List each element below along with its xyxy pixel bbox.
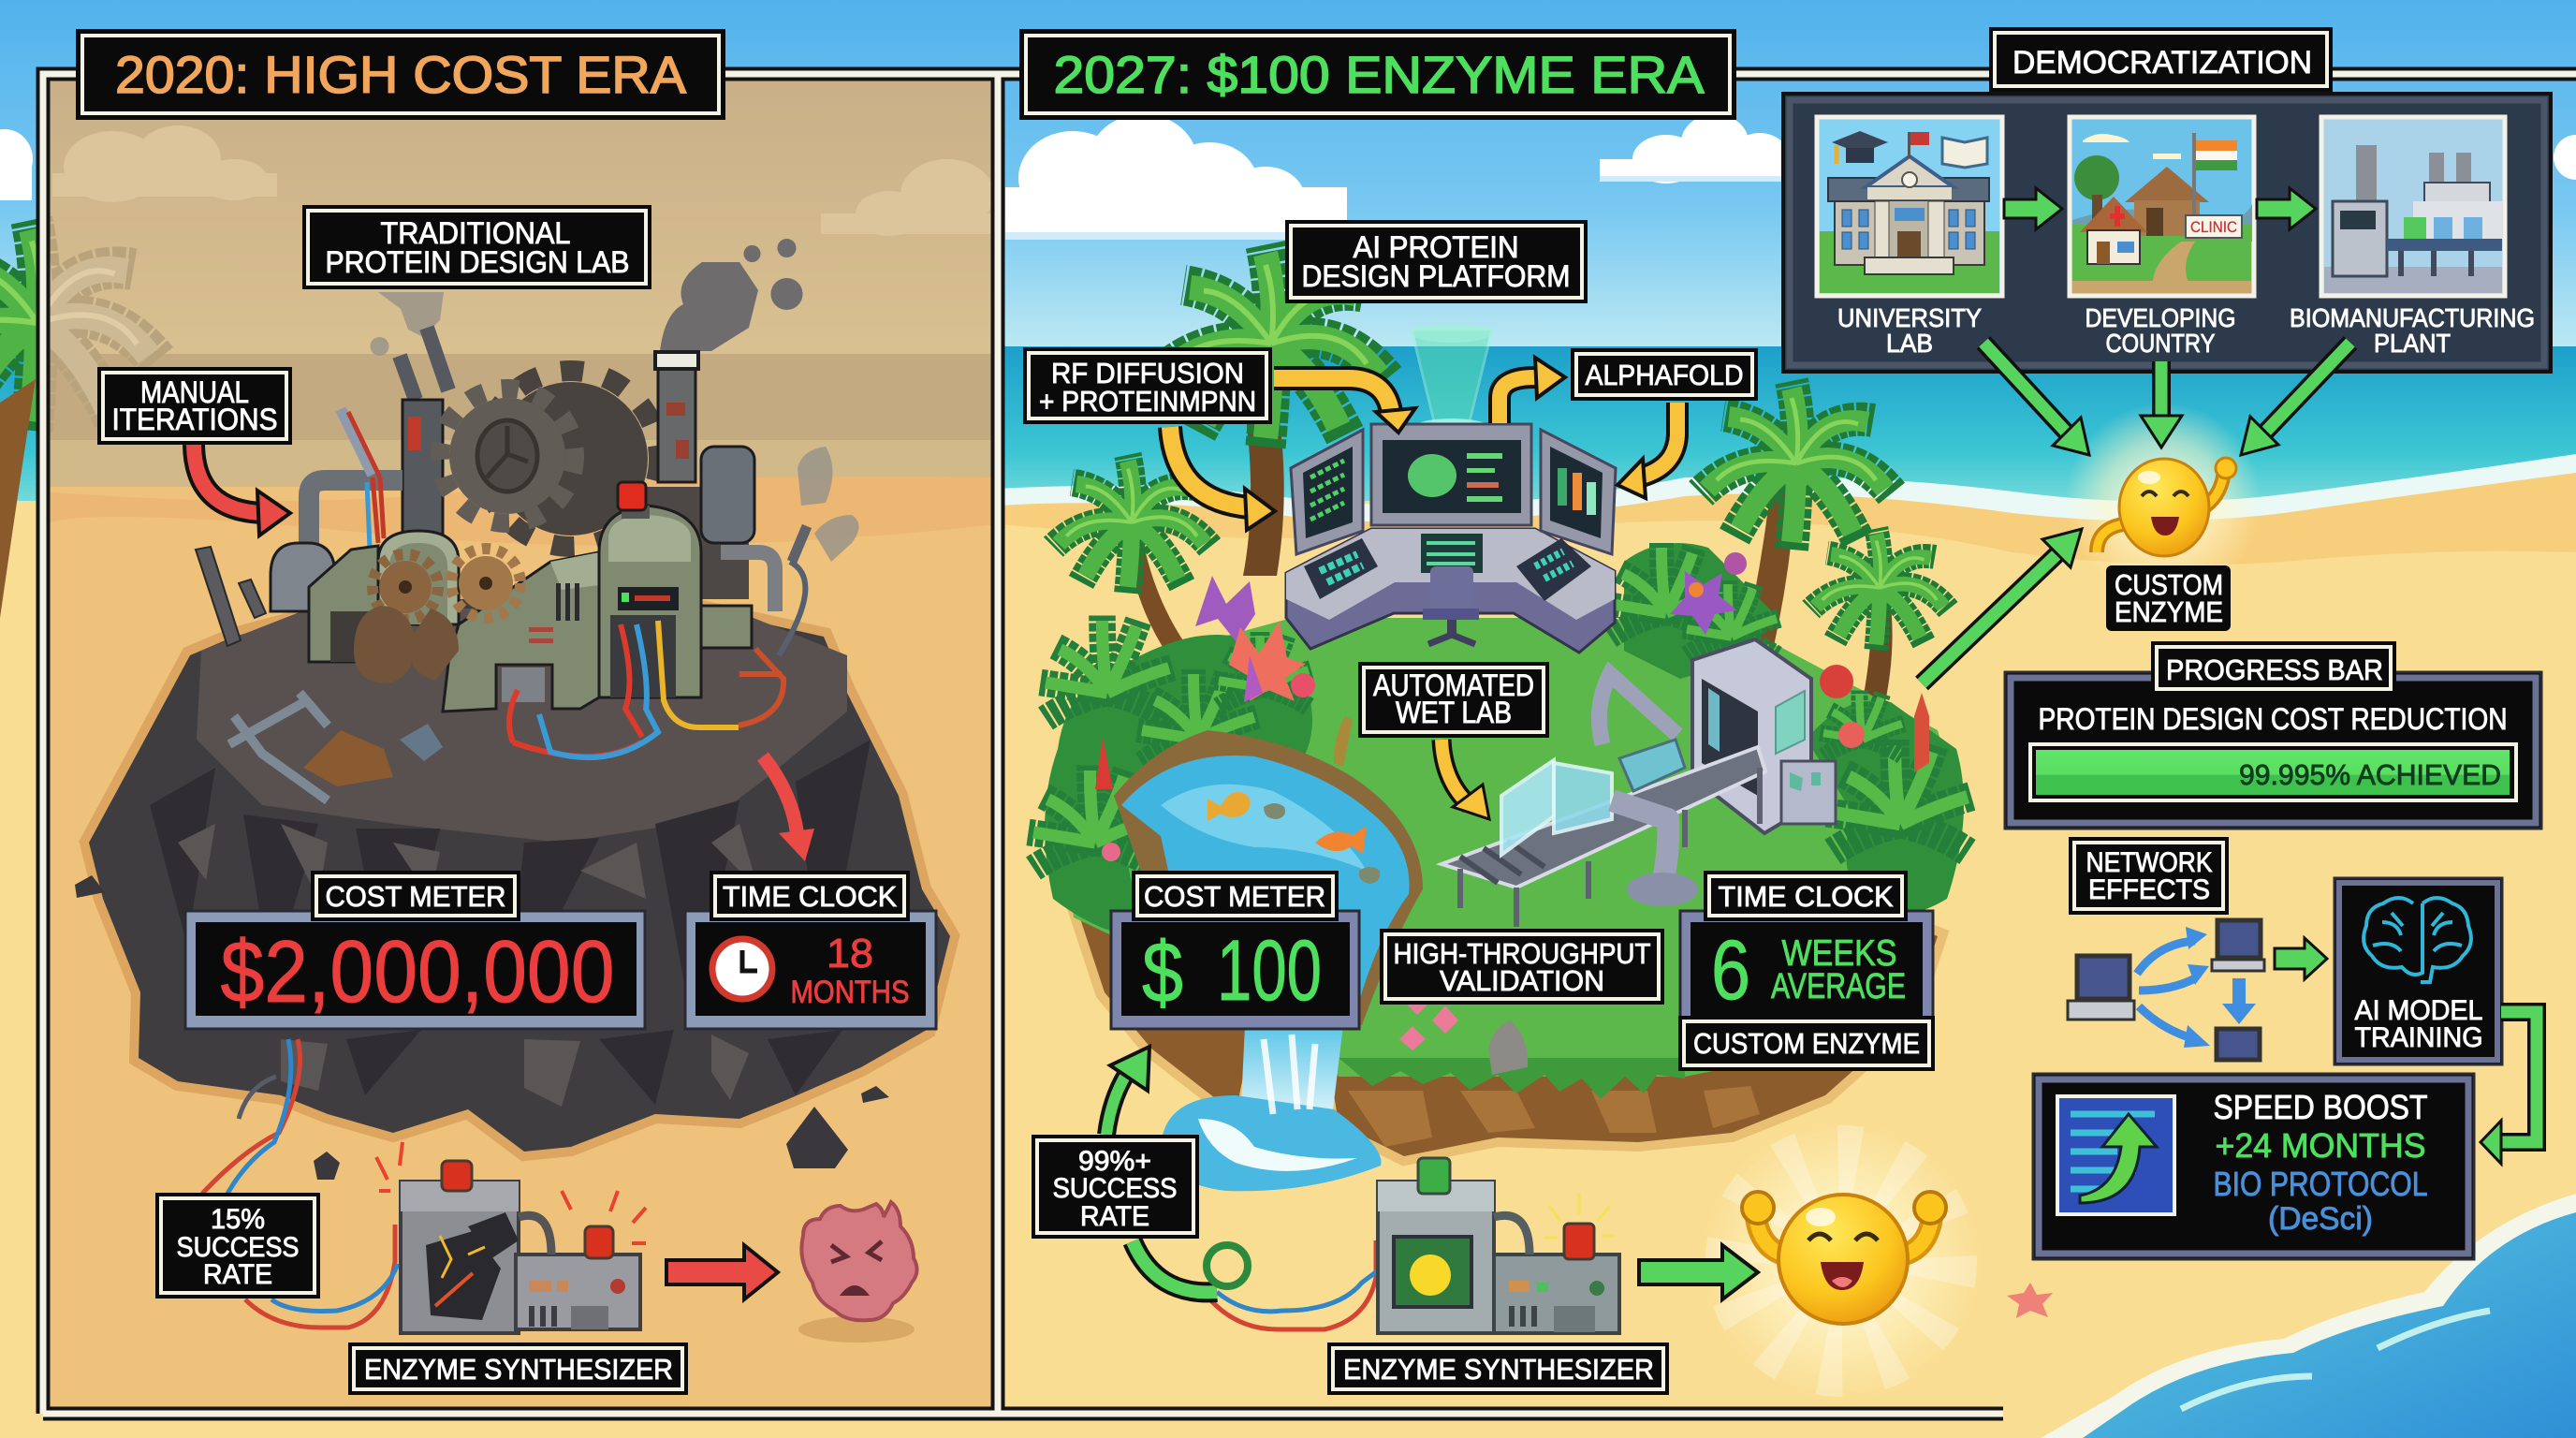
title: 2020 high cost era: 2020: HIGH COST ERA [115,45,687,104]
label: university lab [1837,303,1982,358]
time clock: 2020: MONTHS [790,975,910,1010]
panel: speed boost: SPEED BOOST [2213,1088,2428,1126]
label: manual iterations [97,367,292,445]
wires and green loop: synthesizer to success rate [1133,1240,1381,1329]
label: enzyme synthesizer 2027: ENZYME SYNTHESIZER [1343,1353,1654,1386]
wires: lab to synthesizer [202,1039,398,1328]
label: developing country [2086,303,2235,358]
label: custom enzyme banner: CUSTOM ENZYME [1693,1027,1920,1060]
palm trees behind the island [1123,244,1893,718]
panel: AI model training: TRAINING [2355,1022,2482,1053]
arrow: red lab to time clock [763,756,814,861]
arrow: wet lab to conveyor [1442,740,1489,819]
arrow: AI model to speed boost [2481,1012,2537,1164]
time clock: 2027: 6 [1711,924,1750,1018]
tab: progress bar: PROGRESS BAR [2166,653,2383,686]
tab: progress bar [2151,641,2396,695]
card: developing country clinic [2070,117,2254,296]
icon: hologram cone [1412,324,1492,433]
diagram: network of laptops [2068,920,2264,1060]
panel: speed boost [2033,1074,2474,1259]
label: automated wet lab: AUTOMATED [1373,668,1534,702]
icon: upward green arrow screen [2057,1096,2174,1214]
time clock: 2020 [685,871,936,1029]
arrow: RF diffusion to platform [1274,378,1415,433]
panel: progress bar: PROTEIN DESIGN COST REDUCTION [2039,702,2507,736]
panel: AI model training: AI MODEL [2355,995,2482,1026]
label: AI protein design platform: DESIGN PLATFORM [1301,259,1571,293]
icon: sad misfolded enzyme [798,1202,917,1343]
icon: happy custom enzyme [1701,1121,1982,1401]
label: developing country: COUNTRY [2106,329,2216,358]
icon: laptop source [2068,956,2134,1020]
cost meter: 2027: $ [1142,925,1183,1020]
time clock: 2027: WEEKS [1782,933,1896,974]
panel: democratization [1783,27,2551,372]
arrow: RF diffusion to console [1170,427,1275,530]
illustration: broken rock island [75,599,950,1180]
label: manual iterations: ITERATIONS [112,403,277,436]
label: university lab: LAB [1886,329,1933,358]
label: university lab: UNIVERSITY [1837,303,1982,332]
icon: laptop lower [2217,1029,2260,1060]
label: enzyme synthesizer 2020: ENZYME SYNTHESIZER [364,1353,673,1386]
label: AI protein design platform [1285,220,1588,303]
cost meter: 2020: $2,000,000 [221,922,614,1020]
arrow: developing country to enzyme [2141,361,2182,448]
card: biomanufacturing plant [2321,117,2505,296]
cost meter: 2020 [185,871,645,1029]
label: 15% success rate [155,1193,320,1299]
tab: time clock [710,871,910,921]
tab: time clock: TIME CLOCK [1719,880,1894,913]
arrow: network to AI model [2275,938,2327,979]
label: automated wet lab [1358,662,1549,738]
label: AlphaFold: ALPHAFOLD [1586,359,1743,391]
chart: progress bar fill: 99.995% ACHIEVED [2239,758,2501,791]
tab: cost meter: COST METER [326,880,505,913]
label: enzyme synthesizer 2020 [348,1343,688,1395]
label: 99%+ success rate [1032,1135,1199,1239]
label: 15% success rate: 15% [211,1204,265,1235]
icon: starfish [2007,1283,2053,1318]
arrow: platform to AlphaFold [1500,358,1565,423]
label: 99%+ success rate: RATE [1080,1201,1149,1232]
time clock: 2020: 18 [827,931,873,976]
arrow: success rate up to cost meter [1106,1047,1149,1135]
panel: progress bar [2005,641,2541,829]
label: custom enzyme: CUSTOM [2115,568,2223,601]
illustration: broken enzyme synthesizer [376,1142,646,1333]
arrow: biomanufacturing plant to enzyme [2241,343,2350,455]
label: manual iterations: MANUAL [140,375,249,409]
label: custom enzyme banner [1678,1016,1935,1071]
small palm trees in front [1053,455,1948,650]
icon: small custom enzyme with glow [2065,403,2261,599]
bottom right sea with foam [2041,1194,2576,1438]
label: traditional protein design lab: TRADITIONAL [380,216,571,250]
icon: operator chair [1423,566,1479,644]
label: network effects [2069,837,2229,915]
icon: fish orange [1315,826,1367,854]
title: 2027 $100 enzyme era [1019,29,1736,120]
label: network effects: NETWORK [2086,847,2213,878]
tab: time clock [1704,871,1908,921]
label: traditional protein design lab [302,205,651,289]
label: 99%+ success rate: 99%+ [1078,1146,1151,1177]
card: university lab [1817,117,2002,296]
label: 15% success rate: SUCCESS [176,1232,300,1263]
icon: scanner machine [1692,639,1836,833]
label: biomanufacturing plant [2290,303,2535,358]
illustration: pond, waterfall and fish [1114,730,1423,1191]
arrow: university to developing country [2004,188,2062,229]
label: developing country: DEVELOPING [2086,303,2235,332]
time clock: 2027: AVERAGE [1771,967,1906,1006]
label: custom enzyme [2106,565,2231,631]
arrow: red input to lab [194,445,290,536]
label: AI protein design platform: AI PROTEIN [1354,230,1518,264]
illustration: AI protein design platform console [1286,324,1616,653]
icon: laptop upper [2212,920,2264,971]
arrow: green synthesizer output [1639,1245,1758,1299]
arrow: developing country to plant [2257,188,2316,229]
heading: democratization: DEMOCRATIZATION [2012,45,2312,81]
label: custom enzyme: ENZYME [2115,595,2223,628]
cost meter: 2027 [1111,871,1359,1029]
tab: cost meter [311,871,520,921]
illustration: tropical island with cliffs [1058,618,1956,1156]
tab: cost meter [1132,871,1339,921]
illustration: rusty traditional lab machine [196,239,859,757]
arrow: AlphaFold to console [1617,403,1677,498]
label: 15% success rate: RATE [203,1259,272,1290]
title: 2020 high cost era [76,29,725,120]
background scene: sky, sea and beach [0,0,2576,618]
cost meter: 2027: 100 [1217,923,1322,1019]
icon: clock [712,939,772,999]
illustration: automated wet lab conveyor and robot [1442,639,1836,927]
tab: cost meter: COST METER [1144,880,1325,913]
label: enzyme synthesizer 2027 [1327,1343,1669,1395]
label: RF diffusion + ProteinMPNN: + PROTEINMPNN [1039,385,1256,418]
arrows: blue network links [2137,927,2256,1048]
panel: 2020 high cost era [0,74,998,1414]
card: developing country clinic: CLINIC [2190,218,2237,236]
tab: time clock: TIME CLOCK [723,880,897,913]
icon: glowing brain [2364,898,2471,982]
illustration: jungle foliage and flowers [1028,543,1973,1075]
label: high-throughput validation: HIGH-THROUGHPUT [1393,937,1651,970]
label: biomanufacturing plant: PLANT [2374,329,2451,358]
illustration: working enzyme synthesizer [1378,1158,1619,1333]
label: AlphaFold [1571,348,1758,401]
panel: 2027 enzyme era [1023,220,1982,1401]
panel: AI model training [2334,878,2502,1064]
heading: democratization [1989,27,2333,92]
label: 99%+ success rate: SUCCESS [1052,1173,1178,1204]
label: high-throughput validation: VALIDATION [1440,964,1604,997]
label: biomanufacturing plant: BIOMANUFACTURING [2290,303,2535,332]
label: network effects: EFFECTS [2088,874,2210,905]
arrow: university lab to enzyme [1983,343,2089,455]
icon: fish striped [1208,792,1251,821]
title: 2027 $100 enzyme era: 2027: $100 ENZYME ERA [1054,45,1705,104]
label: high-throughput validation [1380,929,1664,1005]
label: automated wet lab: WET LAB [1396,696,1512,729]
panel: speed boost: +24 MONTHS [2215,1126,2426,1165]
chart: progress bar fill [2030,744,2516,800]
label: RF diffusion + ProteinMPNN [1023,347,1272,424]
arrow: island to enzyme [1922,529,2082,683]
label: traditional protein design lab: PROTEIN DESIGN LAB [326,245,629,279]
panel: speed boost: BIO PROTOCOL [2213,1165,2428,1203]
panel: speed boost: (DeSci) [2268,1201,2373,1237]
arrow: red synthesizer output [666,1245,778,1299]
label: RF diffusion + ProteinMPNN: RF DIFFUSION [1051,357,1244,389]
time clock: 2027 [1680,871,1933,1029]
